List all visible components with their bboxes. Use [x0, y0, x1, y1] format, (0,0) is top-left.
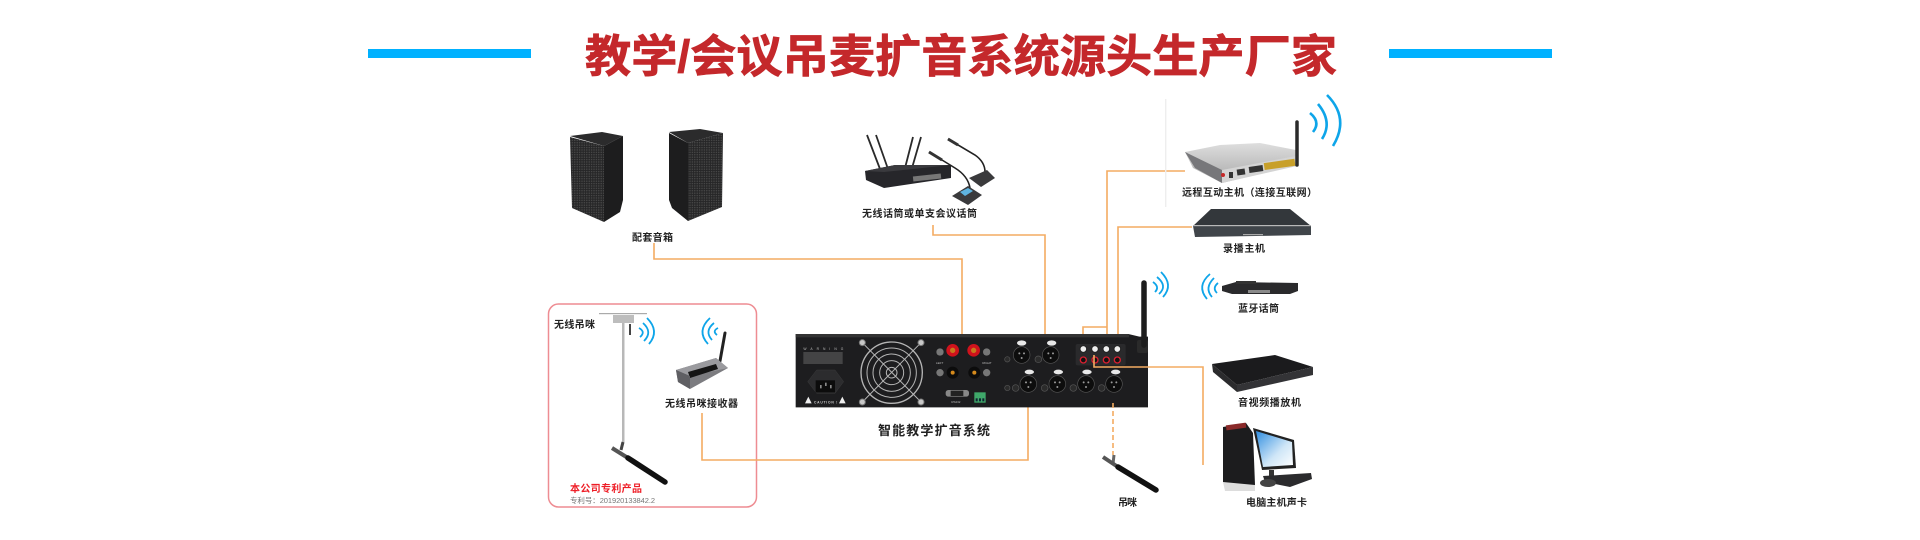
RCA jacks [1076, 344, 1126, 365]
label: amplifier: 智能教学扩音系统 [878, 423, 990, 438]
icon: computer with monitor [1223, 423, 1312, 491]
green terminal block [974, 392, 986, 403]
warning text block: WARNING [803, 347, 844, 351]
power socket [808, 370, 844, 393]
icon: router with wifi [1185, 95, 1340, 183]
wire: rca tap to sound card [1094, 355, 1203, 465]
panel: wireless ceiling mic [548, 304, 756, 507]
icon: wireless mic receiver and conference mics [865, 135, 995, 205]
title bar left [368, 49, 531, 58]
icon: hanging mic [612, 442, 665, 482]
wire: wireless receiver to amplifier [702, 398, 1028, 460]
label: remote host: 远程互动主机（连接互联网） [1182, 186, 1317, 199]
label: wireless ceiling mic: 无线吊咪 [554, 318, 595, 331]
label: wireless receiver: 无线吊咪接收器 [665, 397, 738, 410]
icon: recording host [1193, 209, 1311, 237]
speaker terminals: LEFT [936, 361, 943, 365]
label: ceiling mic: 吊咪 [1118, 496, 1137, 509]
icon: AV player [1212, 355, 1313, 392]
wire: speaker to amplifier [654, 243, 962, 361]
icon: amplifier antenna with waves [1137, 272, 1168, 353]
wire: wireless mic to amplifier [933, 225, 1045, 357]
icon: ceiling mic [1103, 455, 1156, 490]
label: computer sound card: 电脑主机声卡 [1246, 496, 1307, 509]
caution mark [805, 397, 846, 404]
label: recording host: 录播主机 [1223, 242, 1265, 255]
icon: wireless receiver [676, 318, 728, 389]
callout: patent product: 本公司专利产品 [570, 482, 642, 495]
wire: ceiling mic dashed link [1112, 403, 1114, 455]
wire: remote host to amplifier [1083, 171, 1185, 348]
label: bluetooth mic: 蓝牙话筒 [1238, 302, 1279, 315]
title: 教学/会议吊麦扩音系统源头生产厂家 [585, 31, 1337, 82]
divider faint [1165, 99, 1166, 207]
label: AV player: 音视频播放机 [1238, 396, 1301, 409]
icon: right speaker [669, 129, 723, 221]
XLR inputs [1005, 340, 1122, 392]
wire: recording host to amplifier [1118, 227, 1192, 348]
speaker terminals: RIGHT [982, 361, 992, 365]
icon: amplifier rear panel [796, 334, 1148, 407]
icon: left speaker [570, 132, 623, 222]
label: speakers: 配套音箱 [632, 231, 673, 244]
speaker terminals [936, 344, 992, 379]
RS232 port: RS232 [951, 400, 961, 404]
icon: bluetooth mic with waves [1202, 274, 1298, 299]
cooling fan [859, 340, 924, 405]
icon: ceiling mount [599, 313, 647, 442]
text: patent number: 专利号：201920133842.2 [570, 495, 655, 505]
caution mark: CAUTION ! [814, 400, 837, 404]
RS232 port [946, 390, 969, 404]
title bar right [1389, 49, 1552, 58]
label: wireless or conference mic: 无线话筒或单支会议话筒 [862, 207, 977, 220]
icon: ceiling wifi waves [639, 318, 654, 344]
